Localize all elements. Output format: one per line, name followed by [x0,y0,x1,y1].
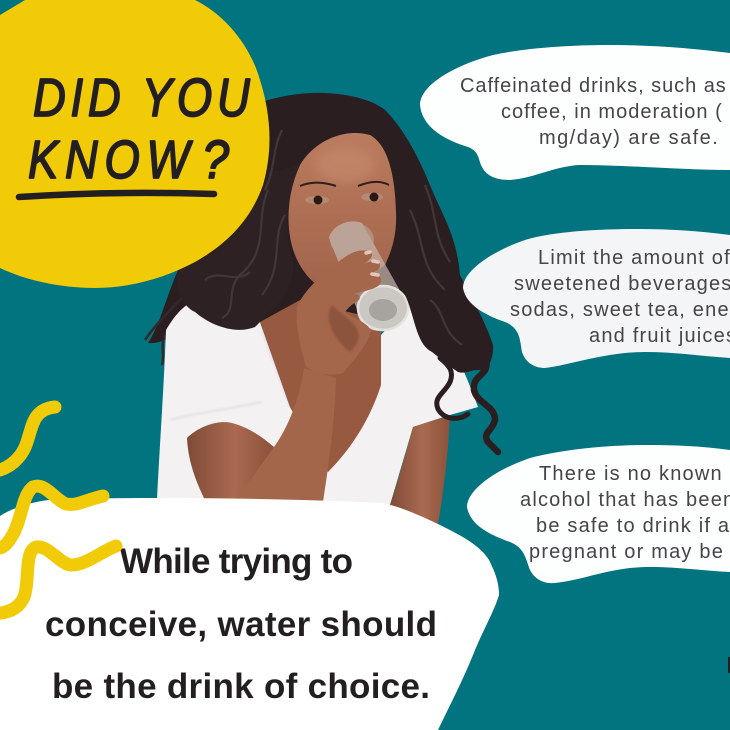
stray hair left [145,290,190,365]
panel: sweetened drinks bubble [463,229,730,368]
squiggle 3 [0,546,116,613]
heading: did you know [28,67,251,190]
panel: main message [0,498,499,730]
yellow blob [0,0,269,288]
photo: woman drinking water [145,93,498,524]
fingernails [366,252,378,275]
message text: While trying to [120,542,353,581]
left eyebrow [300,183,336,186]
bubble text: mg/day) are safe. [539,127,719,149]
bubble shape [463,229,730,368]
hair back [148,93,460,343]
bubble text: sweetened beverages [514,273,730,295]
upper left arm [187,422,274,502]
bubble shape [420,45,730,180]
bubble text: be safe to drink if a [536,515,730,537]
hair curl outer [474,360,498,452]
bubble text: Caffeinated drinks, such as [460,75,727,97]
panel: alcohol bubble [467,445,730,583]
bubble text [520,463,730,563]
forearm [236,368,336,502]
hair curl inner [437,358,468,418]
hair front mass right [396,145,493,373]
white message blob [0,498,499,730]
shirt [157,300,478,505]
squiggle 1 [0,407,55,470]
heading: did you know: ? [202,129,229,190]
bubble text [510,247,730,347]
heading underline [19,193,214,197]
message text: conceive, water should [45,605,437,644]
right eyebrow [358,182,389,186]
face [288,133,396,295]
right arm [390,415,450,524]
hand shadow [328,305,359,352]
shirt folds [170,330,290,420]
hair strands [205,130,462,345]
squiggle 2 [0,486,103,548]
panel: caffeine bubble [420,45,730,180]
chest [260,300,381,472]
right eye [361,192,383,202]
bubble text: coffee, in moderation ( [501,101,723,123]
bubble text [460,75,727,149]
heading: did you know: KNOW [28,129,193,190]
bubble shape [467,445,730,583]
message text: be the drink of choice. [52,667,430,706]
heading: did you know: DID YOU [33,67,251,128]
glass [329,221,408,331]
bubble text: Limit the amount of [538,247,730,269]
bubble text: alcohol that has been [520,489,730,511]
panel: did you know blob [0,0,269,288]
hair front mass left [177,165,300,330]
bubble text: pregnant or may be [529,541,724,563]
clipped dark glyph at right edge [728,657,730,673]
left eye [305,196,329,204]
hand [297,250,381,375]
forehead highlight [315,147,375,183]
message text [45,542,437,706]
